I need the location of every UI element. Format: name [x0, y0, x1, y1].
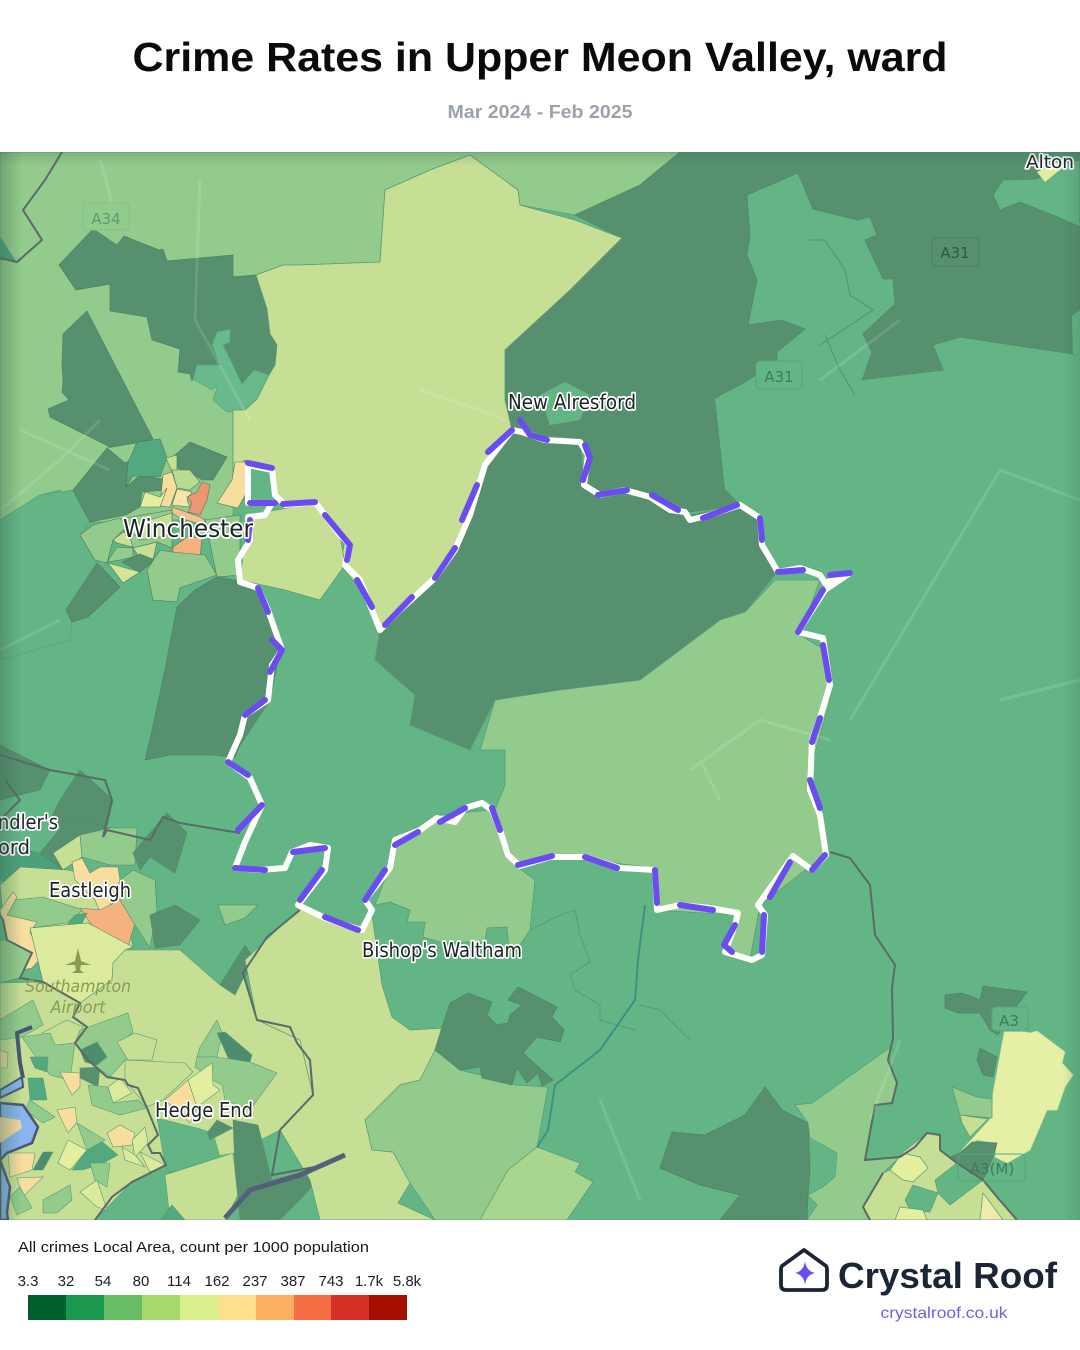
airport label: Airport	[50, 998, 107, 1018]
map regions: Bishop's Waltham south	[245, 905, 690, 1220]
place labels: New Alresford	[508, 390, 636, 414]
legend values: 387	[280, 1273, 306, 1290]
airport icon	[65, 948, 91, 973]
website: crystalroof.co.uk	[880, 1305, 1009, 1322]
place labels: Eastleigh	[49, 878, 131, 902]
roads and rivers	[0, 160, 1080, 1200]
legend title: All crimes Local Area, count per 1000 population	[18, 1239, 369, 1256]
icon: house with star	[781, 1250, 827, 1290]
road labels: A3(M)	[970, 1160, 1014, 1178]
legend values: 5.8k	[393, 1273, 422, 1290]
legend values: 114	[167, 1273, 191, 1290]
map regions: southeast	[660, 986, 1073, 1220]
map regions: northeast	[505, 152, 1080, 512]
legend colour scale	[28, 1295, 407, 1320]
airport label: Southampton	[25, 977, 131, 997]
legend	[18, 1239, 422, 1320]
map regions: Chandler's Ford and Eastleigh	[0, 745, 258, 1025]
title: Crime Rates in Upper Meon Valley, ward	[132, 34, 947, 80]
map regions: Southampton and Hedge End	[0, 950, 340, 1220]
river Itchen	[225, 1155, 345, 1218]
map regions: Winchester	[66, 439, 248, 622]
legend values: 54	[95, 1273, 111, 1290]
map regions: ward interior	[145, 155, 830, 960]
district boundaries	[0, 152, 1017, 1220]
map regions: northwest	[0, 152, 680, 660]
place labels: Hedge End	[155, 1098, 253, 1122]
subtitle: date range: Mar 2024 - Feb 2025	[448, 101, 632, 122]
road labels: A31	[764, 368, 794, 386]
road labels: A3	[999, 1012, 1019, 1030]
legend values: 162	[204, 1273, 230, 1290]
place labels: Winchester	[123, 514, 254, 543]
choropleth map	[0, 152, 1080, 1220]
legend values: 743	[318, 1273, 344, 1290]
airport label	[25, 977, 131, 1018]
legend values	[18, 1273, 422, 1290]
road labels	[83, 203, 1028, 1181]
place labels: Alton	[1026, 152, 1074, 173]
legend values: 1.7k	[355, 1273, 384, 1290]
legend values: 237	[242, 1273, 268, 1290]
place labels	[0, 152, 1074, 1122]
estuary water	[0, 1027, 38, 1220]
ward boundary purple dashes	[228, 420, 850, 952]
legend values: 3.3	[18, 1273, 38, 1290]
map edge vignette	[0, 152, 1080, 1220]
ward boundary white	[228, 430, 850, 960]
logo: Crystal Roof	[781, 1250, 1058, 1322]
road labels: A34	[91, 210, 121, 228]
brand name: Crystal Roof	[838, 1255, 1058, 1296]
legend values: 80	[133, 1273, 149, 1290]
road labels: A31	[940, 244, 970, 262]
place labels: ndler's	[0, 810, 58, 834]
place labels: Bishop's Waltham	[362, 938, 522, 962]
legend values: 32	[58, 1273, 74, 1290]
